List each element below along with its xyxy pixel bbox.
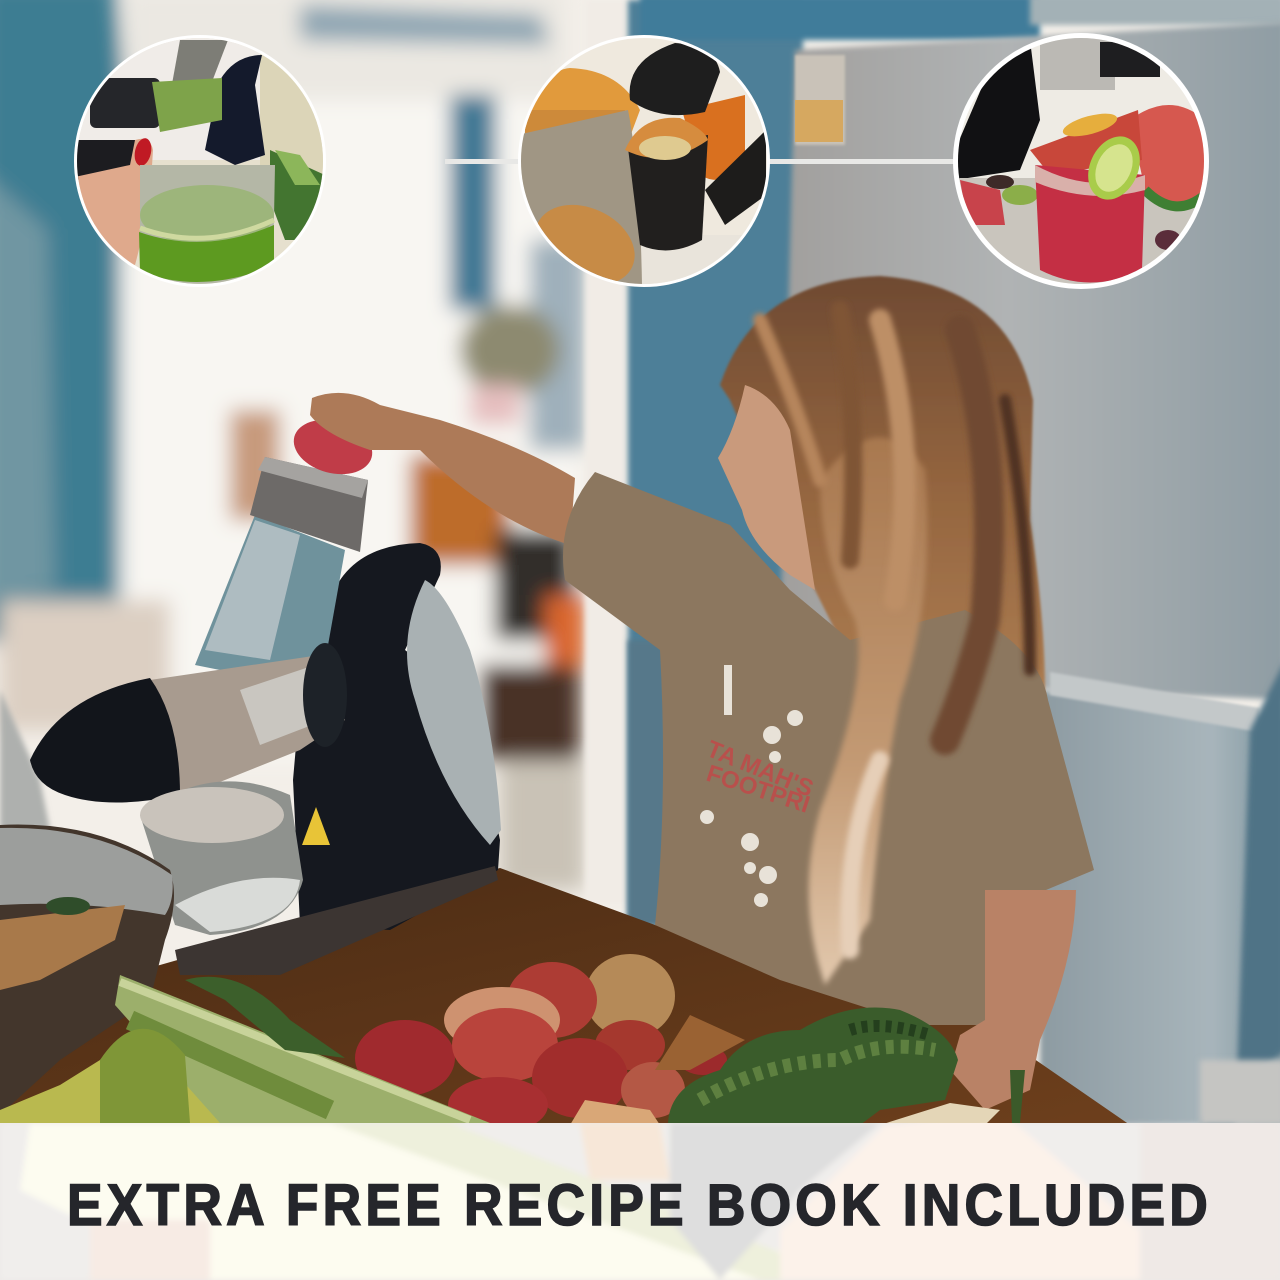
girl: hair back bbox=[720, 276, 1045, 985]
juicer: steel collar bbox=[250, 457, 368, 552]
circle photo: green juice bbox=[70, 30, 330, 290]
girl bbox=[310, 276, 1094, 1110]
bottom caption band bbox=[0, 1110, 1280, 1280]
girl: far arm bbox=[310, 393, 575, 545]
juicer: warning triangle bbox=[302, 807, 330, 845]
juicer: body bbox=[293, 543, 500, 930]
steel bowl with peel bbox=[0, 825, 174, 1115]
circle photo: watermelon drink bbox=[953, 30, 1210, 290]
girl: shirt print: TA MAH'S bbox=[703, 736, 817, 803]
metal edge at left of juicer bbox=[0, 690, 50, 830]
juicer: feed chute bbox=[195, 515, 345, 690]
juicer: silver side panel bbox=[407, 580, 501, 845]
wooden counter bbox=[0, 868, 1130, 1125]
juicer: glass jug bbox=[140, 781, 303, 935]
radish on board bbox=[880, 1070, 1025, 1125]
juicer machine bbox=[30, 412, 501, 975]
circle photo: carrot pulp bbox=[515, 30, 775, 301]
girl: shirt print bbox=[700, 665, 817, 907]
juicer: tray bbox=[175, 866, 498, 975]
girl: long blonde lock bbox=[809, 437, 927, 985]
celery bbox=[0, 975, 490, 1125]
connector line: circle 1 to circle 2 bbox=[445, 159, 520, 164]
connector line: circle 2 to circle 3 bbox=[768, 159, 956, 164]
juicer: apple held bbox=[288, 412, 378, 482]
juicer: transparent drum bbox=[150, 655, 345, 800]
juicer: black end cap bbox=[30, 678, 180, 802]
girl: near arm bbox=[950, 890, 1076, 1110]
girl: hair strands bbox=[760, 310, 1030, 950]
caption text: EXTRA FREE RECIPE BOOK INCLUDED bbox=[67, 1173, 1208, 1237]
kale bbox=[668, 1008, 958, 1125]
girl: t-shirt bbox=[563, 472, 1094, 1025]
girl: shirt print: FOOTPRI bbox=[703, 760, 813, 819]
apples bbox=[355, 954, 745, 1133]
girl: face bbox=[718, 385, 815, 590]
